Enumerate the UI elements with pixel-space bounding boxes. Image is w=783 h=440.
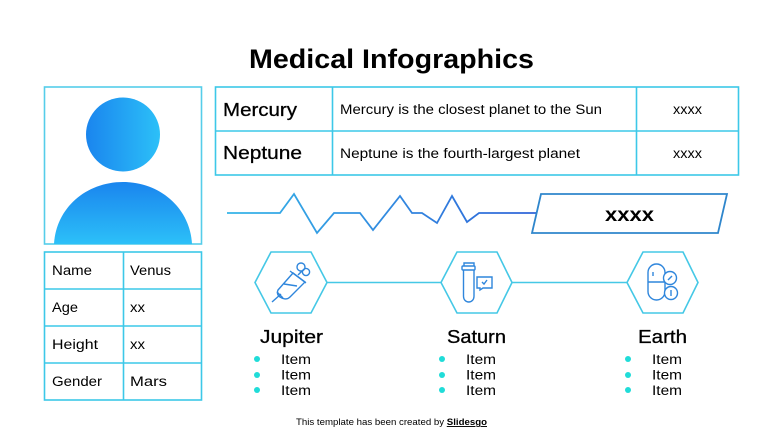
- list: Jupiter items: Item: [281, 368, 311, 382]
- icon: syringe hexagon: [255, 252, 327, 313]
- column: Saturn: [439, 252, 512, 398]
- icon: test tube hexagon: [441, 252, 512, 313]
- table: patient data: Venus: [130, 263, 171, 278]
- list: Saturn items: [439, 352, 496, 398]
- heading: Saturn: Saturn: [447, 326, 506, 347]
- table: planets: Neptune is the fourth-largest planet: [340, 146, 580, 161]
- callout: xxxx: xxxx: [605, 205, 654, 226]
- list: Jupiter items: Item: [281, 383, 311, 398]
- list: Saturn items: Item: [466, 368, 496, 382]
- panel: avatar: [44, 87, 202, 244]
- list: Saturn items: Item: [466, 383, 496, 398]
- list: Saturn items: Item: [466, 352, 496, 367]
- icon: pills hexagon: [627, 252, 698, 313]
- title: Medical Infographics: [249, 44, 534, 74]
- column: Earth: [625, 252, 698, 398]
- list: Jupiter items: Item: [281, 352, 311, 367]
- table: patient data: Name: [52, 263, 92, 278]
- list: Earth items: Item: [652, 383, 682, 398]
- heading: Earth: Earth: [638, 326, 687, 347]
- column: Jupiter: [254, 252, 327, 398]
- table: patient data: xx: [130, 337, 145, 352]
- list: Earth items: Item: [652, 368, 682, 382]
- table: planets: [216, 87, 738, 175]
- callout: xxxx: [532, 194, 727, 233]
- connector line: [327, 282, 627, 284]
- icon: avatar body: [54, 182, 192, 244]
- list: Jupiter items: [254, 352, 311, 398]
- table: patient data: [44, 252, 202, 400]
- table: planets: Neptune: [223, 142, 302, 163]
- table: planets: Mercury is the closest planet to the Sun: [340, 102, 602, 117]
- heading: Jupiter: Jupiter: [260, 326, 323, 347]
- table: patient data: Gender: [52, 374, 103, 389]
- chart: heartbeat line: [227, 194, 538, 233]
- list: Earth items: Item: [652, 352, 682, 367]
- table: patient data: Height: [52, 337, 98, 352]
- table: planets: xxxx: [673, 146, 702, 161]
- icon: avatar head: [86, 98, 160, 172]
- table: planets: Mercury: [223, 99, 298, 120]
- list: Earth items: [625, 352, 682, 398]
- table: patient data: xx: [130, 300, 145, 315]
- table: patient data: Age: [52, 300, 78, 315]
- table: patient data: Mars: [130, 374, 167, 389]
- table: planets: xxxx: [673, 102, 702, 117]
- footer credit: This template has been created by Slidesgo: [296, 417, 487, 428]
